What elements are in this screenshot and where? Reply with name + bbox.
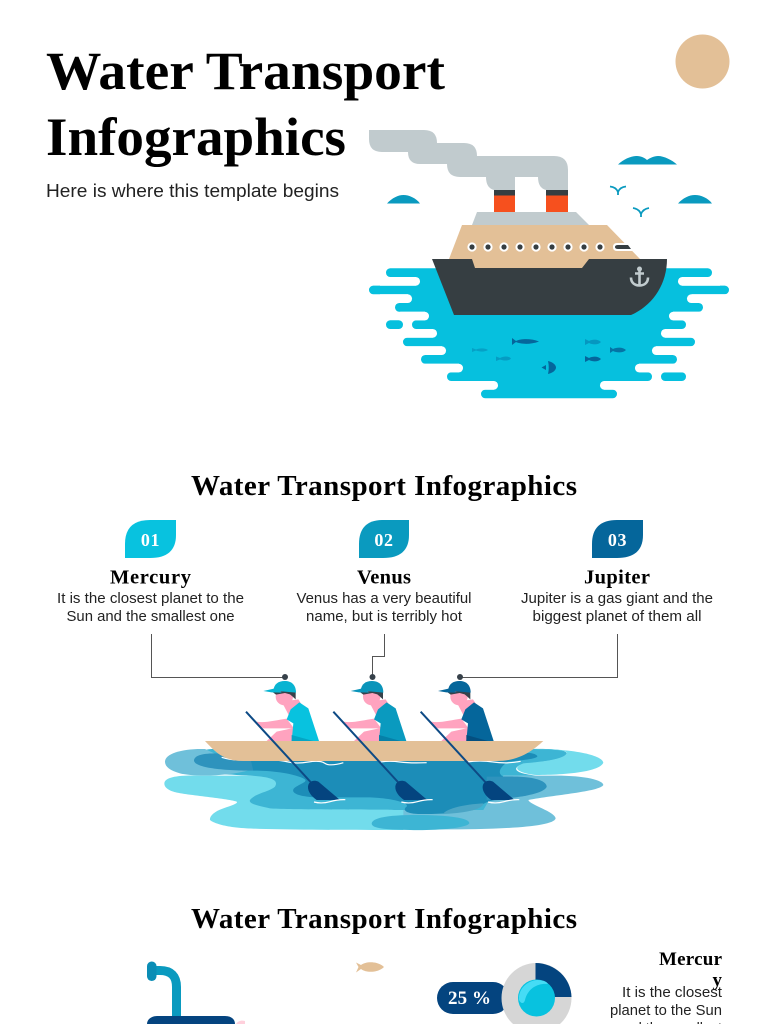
rower 3: [431, 681, 494, 741]
description: name, but is terribly hot: [306, 608, 463, 625]
column: Mercury: [57, 520, 244, 625]
column: Jupiter: [521, 520, 713, 625]
text block: Mercury: It is the closest: [622, 984, 723, 1001]
column: Venus: [296, 520, 472, 625]
donut chart: [502, 963, 572, 1024]
clouds: [387, 156, 712, 204]
pink detail: [236, 1021, 245, 1024]
hull: [432, 259, 667, 315]
section heading: rowers: Water Transport Infographics: [191, 470, 577, 502]
decorative sun circle: [676, 34, 730, 88]
name: Venus: [357, 566, 411, 588]
badge 01: 01: [141, 530, 160, 550]
pill: 25 %: 25 %: [448, 988, 491, 1009]
description: Sun and the smallest one: [66, 608, 234, 625]
name: Jupiter: [584, 566, 650, 588]
smoke: [369, 130, 568, 190]
description: Venus has a very beautiful: [296, 590, 472, 607]
name: Mercury: [110, 566, 192, 588]
oars: [246, 712, 519, 803]
illustration: submarine: [147, 962, 245, 1024]
description: Jupiter is a gas giant and the: [521, 590, 713, 607]
rower 1: [257, 681, 319, 741]
icon: fish: [356, 962, 384, 972]
illustration: rowing boat: [164, 681, 603, 830]
badge 03: [592, 520, 643, 558]
badge 01: [125, 520, 176, 558]
upper deck: [472, 212, 589, 225]
illustration: steamship on water: [369, 130, 735, 398]
water: [164, 749, 603, 830]
text block: Mercury: y: [712, 970, 722, 991]
foam: [222, 757, 521, 765]
text block: Mercury: Mercur: [659, 949, 723, 970]
section heading: submarine: Water Transport Infographics: [191, 903, 577, 935]
badge 02: [359, 520, 409, 558]
pill: 25 %: [437, 982, 509, 1014]
subtitle: Here is where this template begins: [46, 180, 339, 201]
text block: Mercury: [610, 949, 723, 1024]
anchor: [631, 268, 648, 286]
description: [296, 590, 472, 625]
description: [57, 590, 244, 625]
description: It is the closest planet to the: [57, 590, 244, 607]
title: Water Transport: [46, 41, 445, 101]
description: biggest planet of them all: [532, 608, 702, 625]
fish: [472, 338, 626, 374]
birds: [610, 186, 649, 217]
description: [521, 590, 713, 625]
rower 2: [344, 681, 406, 741]
text block: Mercury: planet to the Sun: [610, 1002, 722, 1019]
badge 02: 02: [374, 530, 394, 550]
boat hull: [205, 741, 543, 761]
periscope: [152, 970, 176, 1018]
connector lines: [152, 634, 618, 680]
title: [46, 41, 445, 167]
hull: [147, 1016, 235, 1024]
water: [369, 268, 729, 398]
title: Infographics: [46, 107, 346, 167]
funnels: [494, 190, 515, 196]
cabin: [449, 225, 640, 268]
badge 03: 03: [608, 530, 627, 550]
portholes: [467, 242, 634, 252]
